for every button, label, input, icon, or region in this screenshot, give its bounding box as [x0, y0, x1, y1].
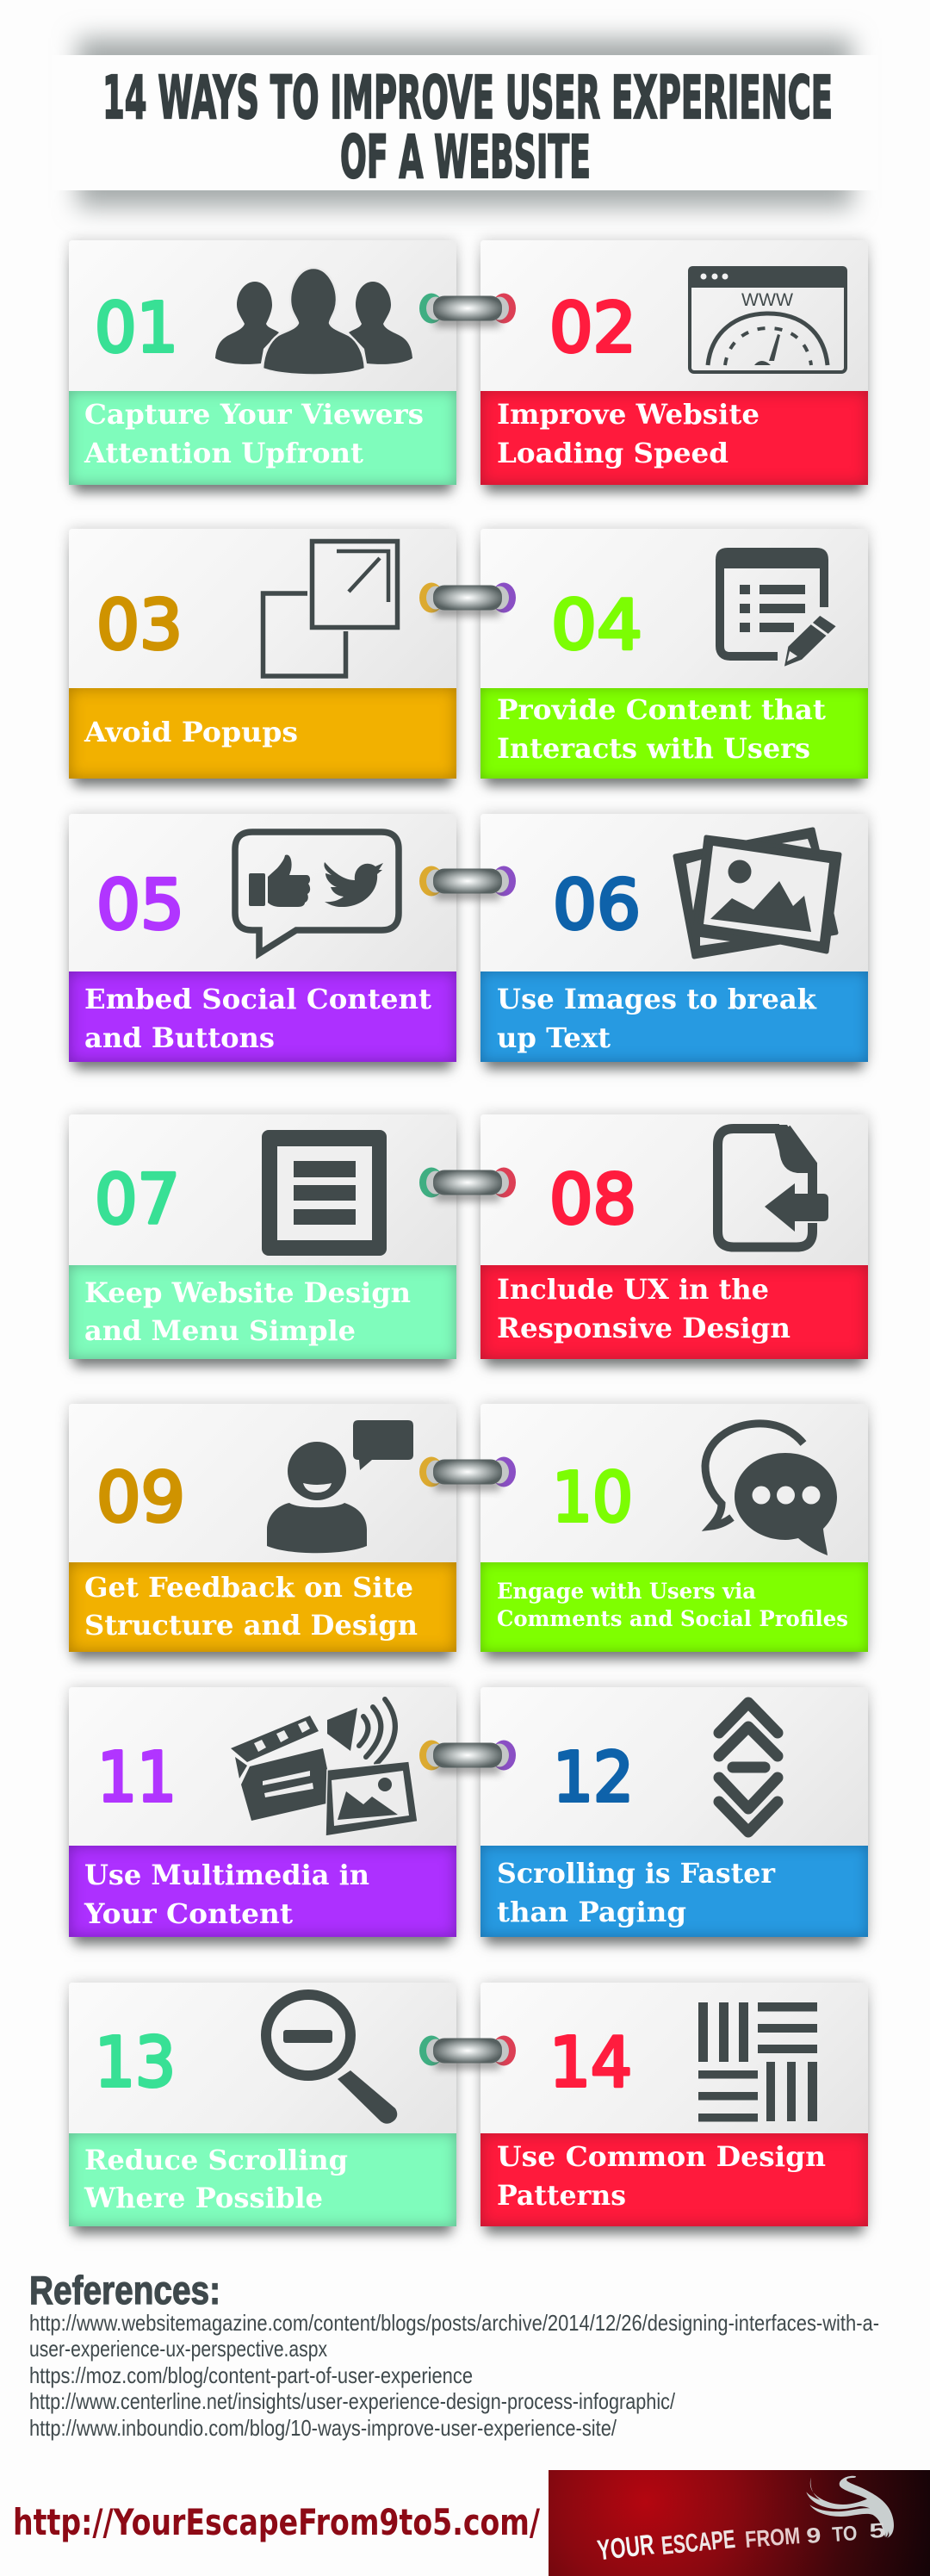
logo wordmark: ESCAPE [660, 2525, 736, 2560]
caption band 13 [69, 2133, 456, 2226]
ring row 6 [419, 1740, 516, 1774]
card 10 [480, 1404, 868, 1652]
caption band 08 [480, 1265, 868, 1359]
caption 12: than Paging [497, 1896, 686, 1928]
card 14 [480, 1983, 868, 2226]
logo wing emblem [806, 2476, 894, 2538]
caption 09: Get Feedback on Site [84, 1571, 413, 1604]
title banner [63, 22, 867, 222]
icon: design patterns [698, 2002, 817, 2122]
card 11 content [84, 1697, 417, 1930]
caption band 11 [69, 1846, 456, 1937]
icon: browser speed gauge: WWW [741, 290, 793, 310]
caption 01 [84, 398, 424, 469]
caption 11: Use Multimedia in [84, 1859, 369, 1891]
caption band 09 [69, 1562, 456, 1652]
number 02: 02 [549, 289, 636, 368]
number 03: 03 [96, 586, 183, 665]
icon: chat bubbles [705, 1424, 837, 1555]
caption 10: Comments and Social Profiles [497, 1606, 848, 1631]
reference links: http://www.centerline.net/insights/user-experience-design-process-infographic/ [29, 2388, 676, 2414]
card 04 [480, 529, 868, 779]
logo wordmark: YOUR [596, 2528, 656, 2566]
card 10 content [497, 1419, 848, 1631]
caption band 03 [69, 688, 456, 779]
caption 10: Engage with Users via [497, 1579, 756, 1604]
caption 02 [497, 398, 760, 469]
caption 11: Your Content [84, 1897, 293, 1930]
caption 05: and Buttons [84, 1021, 275, 1054]
ring row 3 [419, 866, 516, 900]
number 14: 14 [549, 2023, 632, 2102]
icon: browser speed gauge [688, 266, 847, 372]
references block [29, 2268, 879, 2441]
reference links: user-experience-ux-perspective.aspx [29, 2336, 327, 2362]
reference links: http://www.inboundio.com/blog/10-ways-improve-user-experience-site/ [29, 2415, 617, 2441]
card 02 content [497, 266, 847, 469]
caption band 07 [69, 1265, 456, 1359]
icon: multimedia clapper, speaker, picture [231, 1699, 418, 1836]
card 01 [69, 240, 456, 485]
caption 14: Use Common Design [497, 2140, 826, 2173]
card 08 [480, 1114, 868, 1359]
card 04 content [497, 548, 835, 765]
card 13 content [84, 1989, 398, 2214]
caption 12 [497, 1857, 776, 1928]
number 06: 06 [553, 866, 641, 945]
card 11 [69, 1687, 456, 1937]
caption 08: Responsive Design [497, 1312, 790, 1344]
caption band 12 [480, 1846, 868, 1937]
ring row 1 [419, 293, 516, 327]
icon: form with pencil [716, 548, 838, 668]
caption 13: Reduce Scrolling [84, 2144, 348, 2176]
ring row 7 [419, 2036, 516, 2070]
card 12 [480, 1687, 868, 1937]
caption 11 [84, 1859, 369, 1930]
title banner: OF A WEBSITE [340, 123, 591, 192]
logo wordmark: 5 [869, 2519, 886, 2543]
caption 04 [497, 693, 826, 765]
caption 09 [84, 1571, 418, 1642]
caption 07: Keep Website Design [84, 1276, 411, 1309]
icon: people [215, 268, 412, 376]
caption 10 [497, 1579, 848, 1631]
caption 13: Where Possible [84, 2182, 323, 2214]
logo wordmark: FROM [744, 2523, 801, 2553]
card 03 [69, 529, 456, 779]
icon: simple document [262, 1130, 387, 1256]
references heading: References: [29, 2268, 220, 2312]
icon: stacked photos [675, 829, 840, 957]
card 07 content [84, 1130, 411, 1347]
card 06 content [497, 827, 842, 1054]
number 05: 05 [96, 866, 184, 945]
ring row 2 [419, 582, 516, 617]
caption 14 [497, 2140, 826, 2212]
number 12: 12 [553, 1738, 634, 1817]
caption 05: Embed Social Content [84, 983, 431, 1015]
caption 07 [84, 1276, 411, 1347]
card 05 content [84, 829, 431, 1054]
caption 14: Patterns [497, 2179, 626, 2212]
caption band 02 [480, 391, 868, 485]
card 09 content [84, 1420, 418, 1642]
card 01 content [84, 269, 424, 469]
icon: popup windows [264, 541, 398, 676]
caption 06 [497, 983, 817, 1054]
card 08 content [497, 1124, 828, 1344]
caption 06: up Text [497, 1021, 611, 1054]
caption 05 [84, 983, 431, 1054]
caption band 05 [69, 971, 456, 1062]
caption band 01 [69, 391, 456, 485]
card 07 [69, 1114, 456, 1359]
caption 06: Use Images to break [497, 983, 817, 1015]
caption 08 [497, 1273, 790, 1344]
caption 07: and Menu Simple [84, 1314, 356, 1347]
number 01: 01 [95, 289, 178, 368]
logo wordmark [596, 2519, 886, 2566]
caption 01: Attention Upfront [84, 437, 363, 469]
number 11: 11 [97, 1738, 177, 1817]
caption 02: Improve Website [497, 398, 760, 431]
icon: file with arrow [718, 1125, 828, 1247]
number 08: 08 [549, 1160, 636, 1239]
number 10: 10 [552, 1458, 633, 1537]
caption 09: Structure and Design [84, 1609, 418, 1642]
card 13 [69, 1983, 456, 2226]
number 09: 09 [96, 1458, 185, 1537]
brand logo panel [549, 2470, 930, 2576]
caption 08: Include UX in the [497, 1273, 769, 1306]
caption band 10 [480, 1562, 868, 1652]
caption 04: Interacts with Users [497, 732, 810, 765]
card 09 [69, 1404, 456, 1652]
caption 03: Avoid Popups [84, 716, 298, 748]
ring row 5 [419, 1457, 516, 1491]
caption band 04 [480, 688, 868, 779]
caption 13 [84, 2144, 348, 2214]
website url: http://YourEscapeFrom9to5.com/ [13, 2501, 541, 2543]
icon: person with speech bubble [267, 1420, 413, 1553]
caption 02: Loading Speed [497, 437, 728, 469]
number 04: 04 [551, 586, 642, 665]
number 13: 13 [95, 2023, 176, 2102]
number 07: 07 [95, 1160, 180, 1239]
reference links: https://moz.com/blog/content-part-of-user-experience [29, 2362, 473, 2388]
card 06 [480, 814, 868, 1062]
reference links [29, 2310, 879, 2441]
caption band 06 [480, 971, 868, 1062]
logo wordmark: 9 [805, 2523, 822, 2548]
card 12 content [497, 1697, 784, 1928]
icon: scroll chevrons [719, 1703, 778, 1832]
card 03 content [84, 539, 400, 748]
logo wordmark: TO [832, 2522, 858, 2547]
caption band 14 [480, 2133, 868, 2226]
caption 04: Provide Content that [497, 693, 826, 726]
card 02 [480, 240, 868, 485]
caption 12: Scrolling is Faster [497, 1857, 776, 1890]
caption 01: Capture Your Viewers [84, 398, 424, 431]
card 05 [69, 814, 456, 1062]
card 14 content [497, 2002, 826, 2212]
icon: speech bubble with like and bird [235, 832, 399, 953]
icon: magnifier zoom out [266, 1995, 397, 2124]
ring row 4 [419, 1168, 516, 1201]
